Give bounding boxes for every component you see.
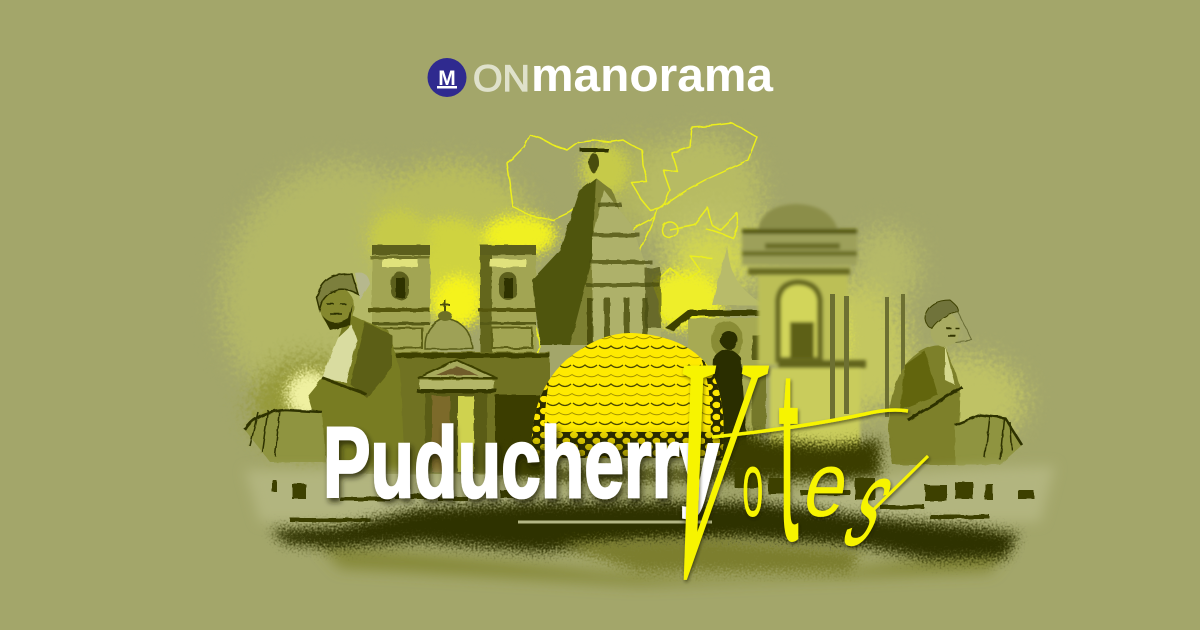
paint splashes xyxy=(189,134,1025,453)
Puducherry: Puducherry xyxy=(323,407,719,519)
logo: Onmanorama xyxy=(428,48,774,101)
logo word ON: ON xyxy=(473,58,530,99)
s flourish xyxy=(868,456,928,515)
letter s: s xyxy=(825,434,920,572)
ground haze xyxy=(320,545,1010,585)
Matrimandir golden dome xyxy=(532,333,724,458)
headline xyxy=(323,291,928,630)
temple tower illustration xyxy=(532,150,662,345)
church facade xyxy=(345,352,550,475)
church illustration xyxy=(345,245,550,475)
Votes lettering xyxy=(628,291,928,630)
logo emblem: M xyxy=(438,67,456,90)
letter e: e xyxy=(796,433,859,536)
church left tower xyxy=(368,245,430,357)
ground highlight xyxy=(518,520,712,524)
right seated man with drum xyxy=(889,300,1022,465)
bridge shadow marks xyxy=(272,470,1034,522)
yellow outline map of India's east coast xyxy=(507,123,757,378)
poster canvas xyxy=(214,58,1054,592)
pavilion and silhouette illustration xyxy=(665,245,793,460)
dark undergrowth xyxy=(500,430,880,480)
church dome and cross xyxy=(425,300,473,349)
stone bridge and dark ground xyxy=(245,430,1055,585)
logo word manorama: manorama xyxy=(531,48,774,101)
blurred memorial gate xyxy=(742,204,866,468)
t-bar flourish xyxy=(712,410,908,437)
letter t: t xyxy=(778,315,799,594)
letter o: o xyxy=(742,433,763,536)
dark ground xyxy=(272,502,1018,560)
gate columns xyxy=(830,294,905,420)
logo emblem xyxy=(428,58,466,97)
church right tower xyxy=(478,245,538,357)
bridge deck xyxy=(245,466,1055,522)
ground mid-tone xyxy=(560,540,860,572)
left seated man with drum xyxy=(245,272,405,470)
